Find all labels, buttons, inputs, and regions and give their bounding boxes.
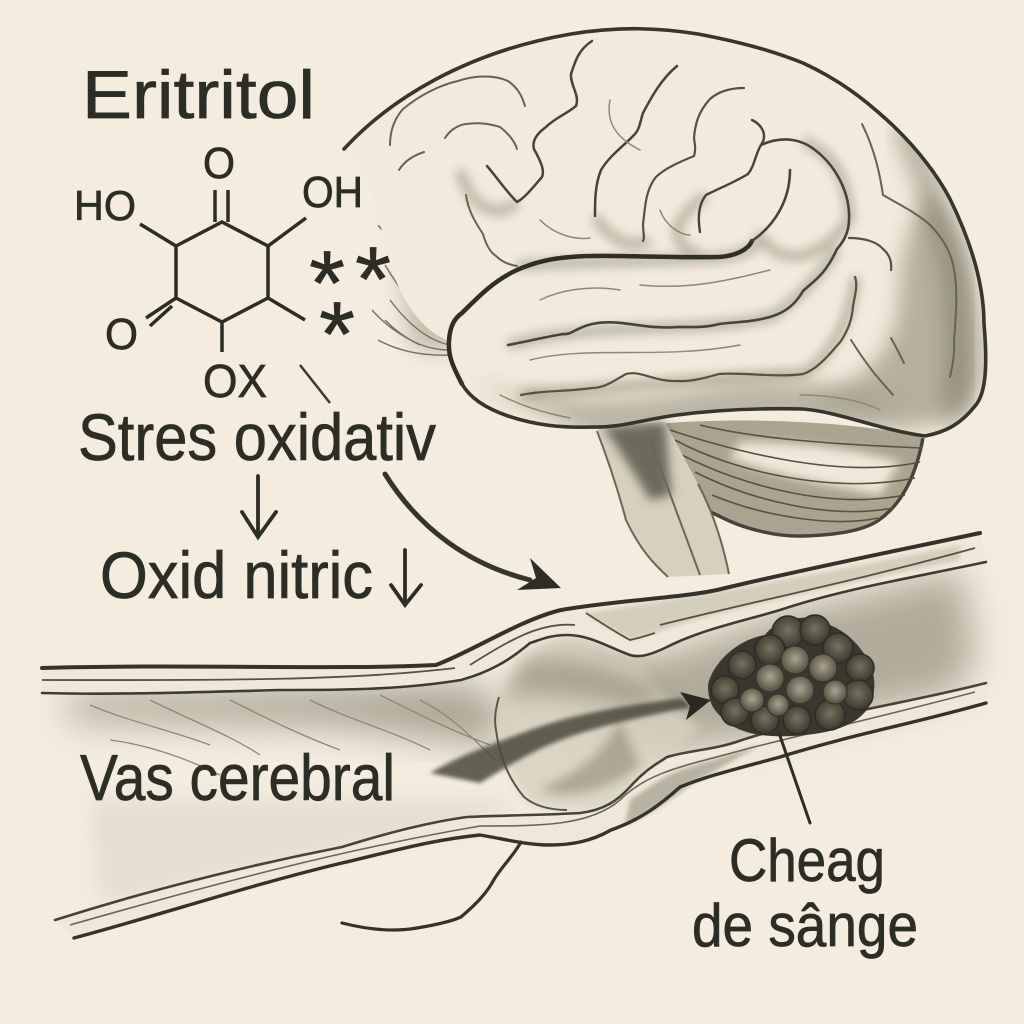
label: blood clot: de sânge	[692, 892, 918, 959]
blood clot	[708, 615, 874, 736]
lumen faint lower shading	[90, 800, 520, 905]
brain stem	[597, 422, 729, 577]
cerebrum outline	[344, 29, 986, 436]
brain shading	[460, 125, 984, 440]
label: cerebral vessel: Vas cerebral	[80, 741, 395, 814]
atom labels: O	[105, 310, 138, 359]
clot pointer line	[779, 733, 810, 823]
brain illustration	[344, 29, 986, 577]
lumen hatching left	[90, 695, 495, 775]
atom labels: OH	[302, 168, 363, 217]
blood flow streak and arrow	[430, 692, 711, 783]
cerebellum	[656, 421, 923, 536]
hatching at frontal base	[372, 225, 470, 355]
title: Eritritol	[82, 57, 315, 133]
atom labels: HO	[74, 182, 136, 229]
bonds	[140, 190, 306, 352]
nerve curve	[342, 842, 521, 930]
atom labels: O	[203, 139, 235, 188]
stars: *	[319, 284, 355, 386]
lower vessel wall	[55, 683, 986, 938]
arrow: nitric oxide decreases	[391, 550, 421, 605]
small stroke near structure	[300, 365, 330, 403]
cerebrum body	[344, 29, 986, 436]
atom labels: OX	[203, 355, 267, 407]
lumen shading left	[70, 685, 500, 745]
stars: *	[309, 233, 345, 335]
blood vessel	[42, 533, 986, 938]
stars: *	[355, 229, 391, 331]
upper vessel wall	[42, 533, 986, 694]
arrow: to vessel	[385, 474, 561, 590]
brain folds	[390, 41, 956, 418]
lumen shading right	[520, 570, 975, 750]
plaque bulge	[495, 640, 700, 811]
arrow: down to nitric oxide	[242, 476, 276, 537]
label: oxidative stress: Stres oxidativ	[78, 400, 436, 474]
label: blood clot: Cheag	[729, 827, 885, 894]
chemical structure	[74, 139, 391, 407]
label: nitric oxide: Oxid nitric	[100, 538, 373, 612]
atom labels	[74, 139, 363, 407]
stars	[309, 229, 391, 386]
